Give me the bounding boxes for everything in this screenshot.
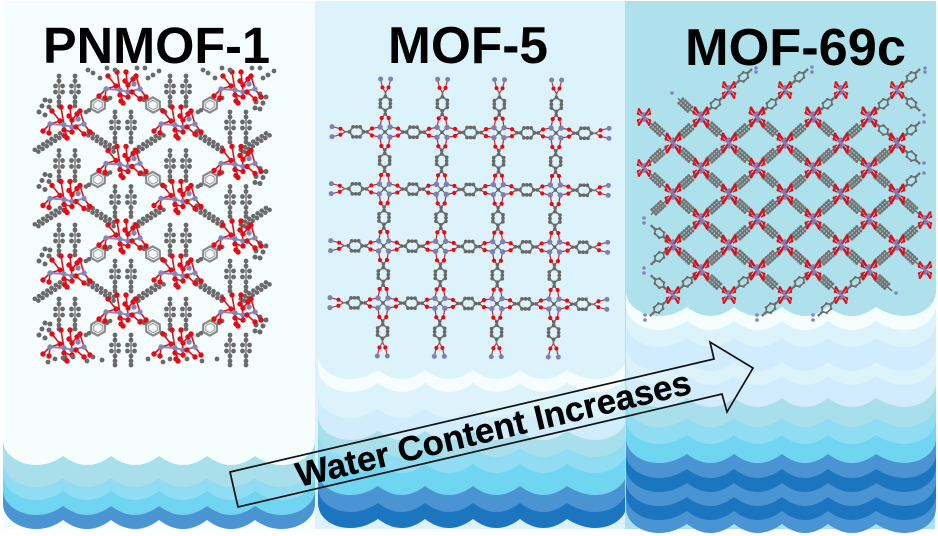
arrow: water content increases — [230, 342, 753, 507]
water layers: MOF-69c — [625, 0, 937, 533]
crystal structure: PNMOF-1 — [35, 68, 274, 365]
arrow label: Water Content Increases — [292, 364, 695, 495]
water layers: PNMOF-1 — [0, 0, 316, 529]
water layers: MOF-5 — [315, 0, 627, 528]
heading: MOF-69c: MOF-69c — [685, 19, 906, 77]
panel: MOF-69c — [625, 0, 937, 533]
crystal structure: MOF-5 — [329, 79, 610, 357]
heading: PNMOF-1: PNMOF-1 — [43, 17, 270, 74]
heading: MOF-5: MOF-5 — [388, 16, 548, 74]
panel: PNMOF-1 — [0, 0, 316, 529]
crystal structure: MOF-69c — [638, 67, 931, 320]
edge linkers — [648, 67, 922, 318]
panel: MOF-5 — [315, 0, 627, 529]
